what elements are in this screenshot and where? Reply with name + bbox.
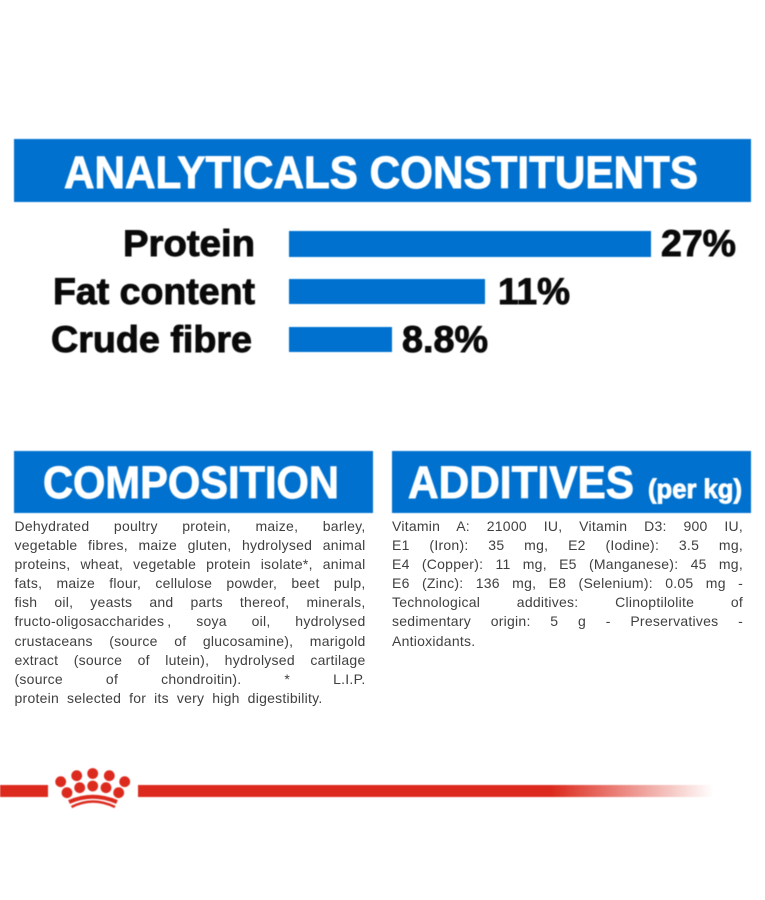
text block: additives: Technological additives: Clinoptilolite of	[392, 594, 743, 610]
bar row: fat content	[53, 271, 570, 312]
text block: composition: protein selected for its very high digestibility.	[14, 690, 322, 706]
text block: composition: crustaceans (source of glucosamine), marigold	[14, 633, 366, 649]
heading: composition: COMPOSITION	[43, 457, 339, 508]
text block: composition	[14, 518, 366, 706]
text block: composition: fats, maize flour, cellulose powder, beet pulp,	[14, 575, 366, 591]
text block: composition: fructo-oligosaccharides , soya oil, hydrolysed	[14, 613, 366, 629]
bar row: protein: 27%	[661, 223, 736, 264]
bar chart: analytical constituents	[51, 223, 736, 360]
panel: analyticals constituents heading	[14, 139, 751, 202]
text block: composition: (source of chondroitin). * L.I.P.	[14, 671, 366, 687]
heading: additives: ADDITIVES	[408, 457, 634, 508]
text block: additives: Vitamin A: 21000 IU, Vitamin D3: 900 IU,	[392, 518, 743, 534]
bar row: fat content: 11%	[498, 271, 570, 312]
text block: additives	[392, 518, 743, 649]
panel: additives heading	[392, 451, 751, 513]
text block: composition: proteins, wheat, vegetable protein isolate*, animal	[14, 556, 366, 572]
icon: royal canin crown	[55, 768, 130, 807]
text block: composition: fish oil, yeasts and parts thereof, minerals,	[14, 594, 366, 610]
heading: analyticals constituents: ANALYTICALS CONSTITUENTS	[64, 147, 698, 198]
bar row: crude fibre	[51, 319, 488, 360]
bar row: fat content: Fat content	[53, 271, 255, 312]
bar row: crude fibre: Crude fibre	[51, 319, 252, 360]
heading: per kg: (per kg)	[648, 474, 742, 504]
text block: composition: vegetable fibres, maize gluten, hydrolysed animal	[14, 537, 366, 553]
text block: composition: extract (source of lutein), hydrolysed cartilage	[14, 652, 366, 668]
text block: composition: Dehydrated poultry protein, maize, barley,	[14, 518, 366, 534]
red line left	[0, 785, 48, 797]
red line right fading	[138, 785, 713, 797]
text block: additives: E6 (Zinc): 136 mg, E8 (Selenium): 0.05 mg -	[392, 575, 743, 591]
panel: composition heading	[14, 451, 373, 513]
text block: additives: E4 (Copper): 11 mg, E5 (Manganese): 45 mg,	[392, 556, 743, 572]
text block: additives: sedimentary origin: 5 g - Preservatives -	[392, 613, 743, 629]
text block: additives: E1 (Iron): 35 mg, E2 (Iodine): 3.5 mg,	[392, 537, 743, 553]
bar row: crude fibre: 8.8%	[402, 319, 488, 360]
text block: additives: Antioxidants.	[392, 633, 475, 649]
bar row: protein: Protein	[123, 223, 255, 264]
bar row: protein	[123, 223, 736, 264]
